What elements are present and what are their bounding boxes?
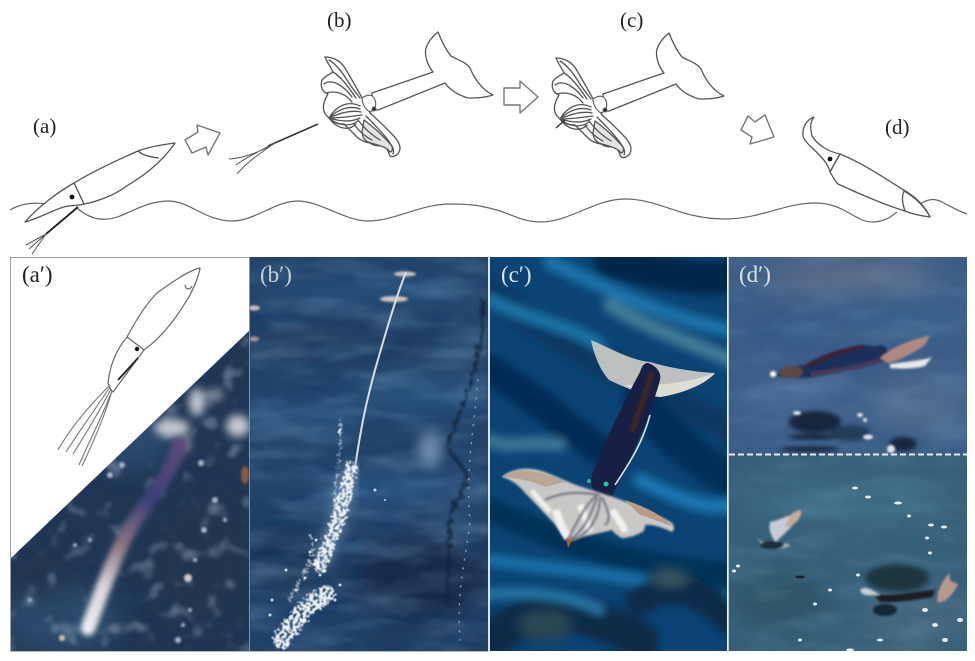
panel: a-prime photo and drawing	[11, 331, 249, 651]
dashed divider	[729, 454, 967, 456]
orange glint	[241, 466, 249, 484]
blurred squid streak	[88, 445, 180, 628]
water texture	[11, 417, 170, 651]
panel: c-prime photo of squid gliding	[480, 257, 730, 651]
squid (d) re-entering	[803, 117, 930, 217]
panel frame lines	[10, 257, 728, 652]
dark and light wave bands	[250, 275, 488, 638]
white corner triangle	[11, 257, 249, 558]
splash highlights (top)	[793, 411, 895, 453]
tail fin	[591, 340, 715, 397]
labels: photo panels	[22, 262, 771, 287]
labels: photo panels: (d′)	[739, 262, 771, 287]
labels: stage letters: (b)	[327, 8, 352, 32]
labels: stage letters: (c)	[620, 8, 643, 32]
panel: d-prime two-part water photo	[729, 257, 975, 652]
dark wake holes (top)	[780, 411, 917, 452]
mantle	[591, 363, 660, 498]
spray at top right	[154, 388, 250, 451]
flying squid wings far away	[248, 272, 416, 342]
squid (c) gliding, tentacles folded	[552, 33, 724, 158]
entering squid, lower left	[755, 510, 801, 549]
arrow b to c	[504, 81, 538, 113]
wave texture	[252, 302, 480, 643]
labels: stage letters: (a)	[33, 114, 56, 138]
distant dark wake	[447, 300, 483, 600]
entering squid, lower right	[860, 573, 958, 616]
scattered droplets	[268, 428, 386, 616]
labels: photo panels: (b′)	[260, 262, 292, 287]
top water tones	[740, 261, 970, 435]
squid (b) gliding with tentacles	[229, 32, 493, 174]
labels: photo panels: (a′)	[22, 262, 53, 287]
distant spray cloud	[418, 432, 442, 468]
wake glow	[323, 470, 351, 560]
arm tips tan shading	[625, 500, 672, 526]
main wake splash	[282, 420, 351, 640]
labels: photo panels: (c′)	[501, 262, 532, 287]
speckle grain	[11, 335, 249, 651]
spread arms and webbing	[502, 469, 674, 540]
ripple texture	[729, 257, 967, 651]
labels: stage letters: (d)	[885, 115, 910, 139]
squid (a) launching	[25, 143, 175, 254]
skimming squid, upper	[770, 335, 932, 378]
arrow a to b	[185, 125, 220, 155]
labels: stage letters	[33, 8, 910, 139]
arrow c to d	[741, 115, 774, 144]
wave streaks	[480, 262, 730, 640]
dark splash patch	[865, 564, 929, 592]
water droplets	[28, 460, 227, 643]
airborne water line	[355, 272, 406, 468]
scattered spray droplets (bottom)	[732, 486, 963, 652]
panel: b-prime water photo with wake	[250, 257, 488, 651]
illustration: water surface line	[10, 199, 967, 222]
arm highlights and dark ribs	[532, 490, 625, 537]
bottom water tones	[732, 487, 967, 642]
green chromatophore glints	[587, 479, 591, 483]
squid drawing in a-prime	[58, 268, 200, 466]
